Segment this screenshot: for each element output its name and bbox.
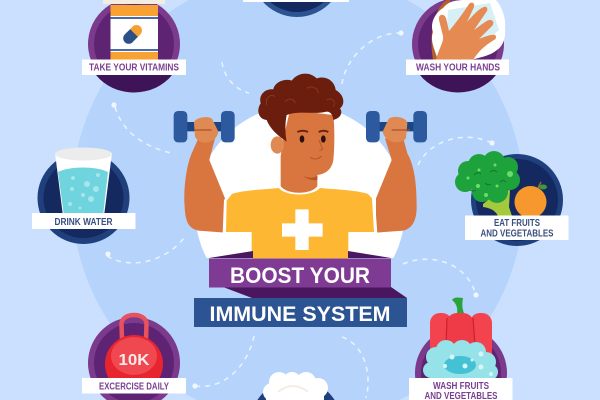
facial features [297,131,328,159]
neck and face [281,110,334,193]
right arm [376,138,417,233]
icon: orange [514,182,547,218]
badge: drink water [32,148,136,244]
banner: boost your [209,258,391,288]
hair [258,74,343,142]
title ribbon [194,251,407,327]
label: wash fruits and vegetables: WASH FRUITS [433,380,489,392]
label: excercise daily: EXCERCISE DAILY [99,381,169,393]
icon: broccoli [455,151,520,216]
figure: man lifting dumbbells [174,74,427,258]
badge: wash your hands [406,0,509,92]
white circle behind figure [195,105,405,258]
cross on shirt [282,209,323,250]
badge: top centre (cropped) [243,0,349,17]
icon: kettlebell: 10K [118,352,150,369]
label: wash fruits and vegetables [409,378,512,400]
label: eat fruits and vegetables: AND VEGETABLES [480,228,554,240]
label: eat fruits and vegetables [465,216,568,240]
badge: take your vitamins [82,0,186,92]
banner: boost your: BOOST YOUR [230,263,370,288]
icon: red pepper in foam [423,298,498,380]
badge: excercise daily [82,315,186,400]
label: eat fruits and vegetables: EAT FRUITS [494,217,540,229]
badge: wash fruits and vegetables [409,298,512,400]
label: wash your hands: WASH YOUR HANDS [416,62,500,74]
right dumbbell [366,111,427,142]
icon: glass of water [55,148,112,216]
t-shirt [223,186,377,258]
left arm [184,138,225,233]
dotted connectors [105,30,495,398]
badge: bottom centre cloud (cropped) [257,372,335,400]
badge: eat fruits and vegetables [455,151,568,246]
banner: immune system: IMMUNE SYSTEM [210,302,390,326]
icon: vitamin bottle [103,0,165,61]
hands [194,117,407,143]
icon: soapy hand [431,0,505,60]
label: take your vitamins: TAKE YOUR VITAMINS [89,62,179,74]
left dumbbell [174,111,235,142]
label: drink water: DRINK WATER [54,216,113,228]
